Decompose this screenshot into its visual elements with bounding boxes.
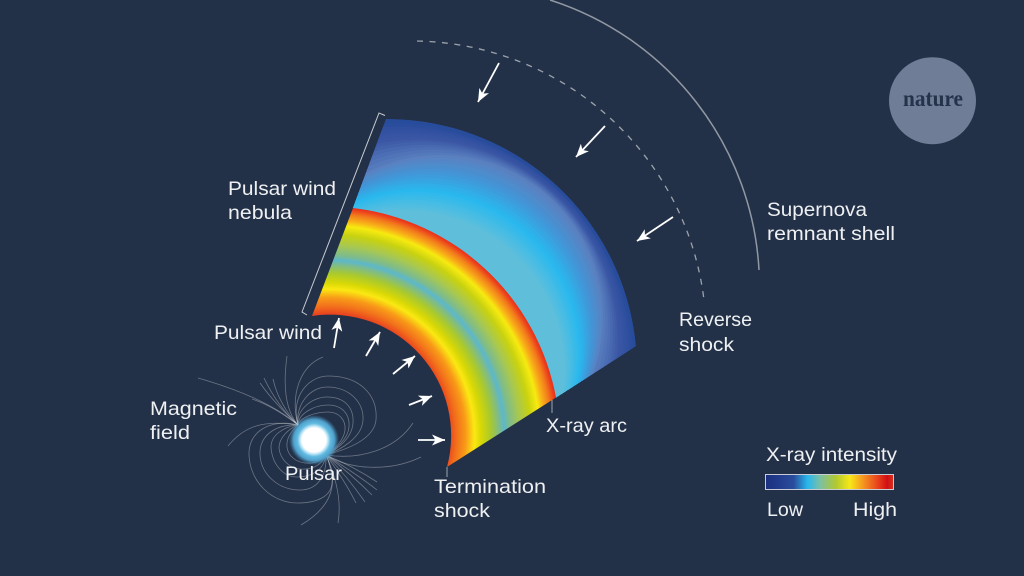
label: termination shock xyxy=(434,476,546,522)
legend: x-ray intensity: High xyxy=(853,499,897,521)
label: pulsar wind nebula: nebula xyxy=(228,202,292,224)
legend: x-ray intensity xyxy=(766,444,897,521)
label: pulsar wind: Pulsar wind xyxy=(214,322,322,344)
label: magnetic field xyxy=(150,398,237,444)
label: reverse shock: Reverse xyxy=(679,309,752,331)
label: supernova remnant shell: remnant shell xyxy=(767,223,895,245)
tick: termination shock xyxy=(446,467,448,477)
label: pulsar wind nebula xyxy=(228,178,336,224)
magnetic field lines xyxy=(198,356,421,525)
logo: nature: nature xyxy=(903,86,963,111)
label: reverse shock: shock xyxy=(679,334,734,356)
reverse shock dashed arc xyxy=(417,41,704,300)
inner rainbow band xyxy=(312,208,556,467)
logo: nature xyxy=(889,57,976,144)
label: pulsar: Pulsar xyxy=(285,463,343,485)
label: termination shock: shock xyxy=(434,500,490,522)
legend: x-ray intensity: X-ray intensity xyxy=(766,444,897,466)
pulsar wind nebula fan xyxy=(312,119,636,467)
legend: x-ray intensity: Low xyxy=(767,499,804,521)
outer blue band xyxy=(353,119,636,398)
label: magnetic field: Magnetic xyxy=(150,398,237,420)
legend colour bar xyxy=(766,474,894,490)
tick: x-ray arc xyxy=(551,400,553,413)
label: pulsar wind nebula: Pulsar wind xyxy=(228,178,336,200)
supernova remnant shell arc xyxy=(550,0,759,270)
inward arrows from reverse shock xyxy=(478,63,673,241)
pulsar star xyxy=(289,415,339,465)
outward pulsar wind arrows xyxy=(334,318,445,440)
label: x-ray arc: X-ray arc xyxy=(546,415,627,437)
label: reverse shock xyxy=(679,309,752,356)
label: magnetic field: field xyxy=(150,422,190,444)
label: supernova remnant shell: Supernova xyxy=(767,199,867,221)
nebula bracket xyxy=(302,113,385,315)
label: supernova remnant shell xyxy=(767,199,895,245)
label: termination shock: Termination xyxy=(434,476,546,498)
